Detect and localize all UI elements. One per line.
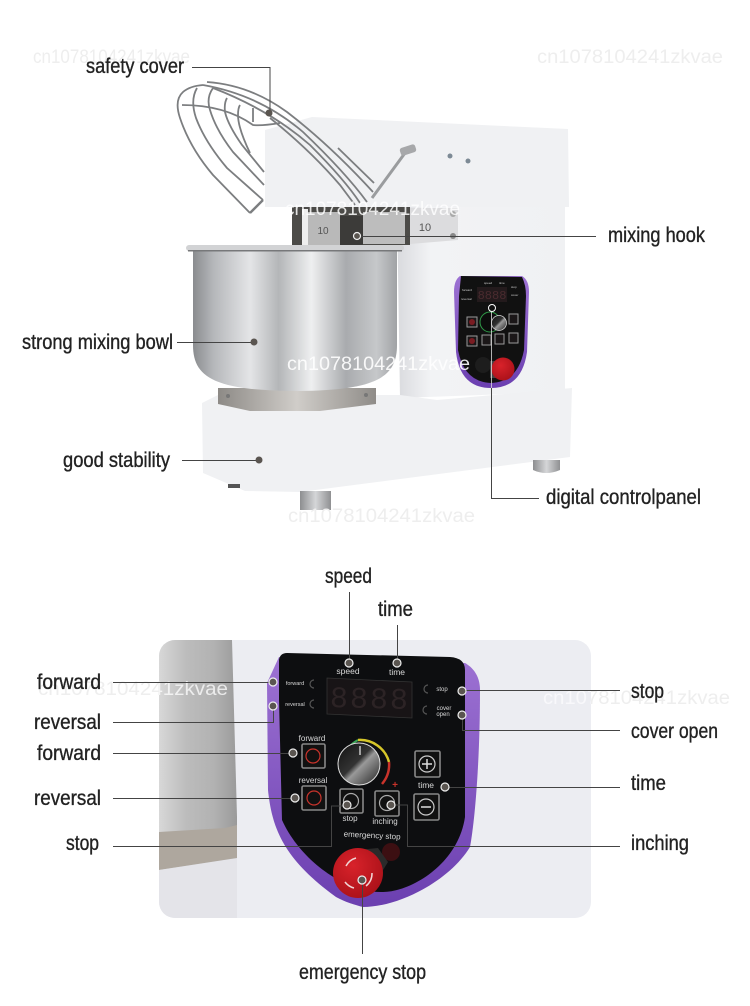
callout: emergency stop [299, 876, 426, 984]
callout: time right [441, 772, 666, 795]
panel labels: inching [372, 817, 398, 826]
callout: reversal button: reversal [34, 787, 101, 810]
mounting hardware: 10 [419, 222, 431, 234]
callout: inching: inching [631, 832, 689, 855]
emergency button [333, 843, 400, 898]
machine head [265, 117, 569, 207]
labels [461, 281, 518, 301]
indicator leds [310, 680, 428, 714]
callout: digital controlpanel [488, 304, 701, 509]
panel labels: reversal [299, 776, 327, 785]
callout: safety cover: safety cover [86, 55, 184, 78]
callout: mixing hook [354, 224, 705, 247]
callout: safety cover [86, 55, 272, 116]
display [327, 678, 412, 718]
callout: stop indicator [458, 680, 664, 703]
display [477, 287, 507, 302]
panel labels: forward [286, 681, 304, 687]
panel labels: reversal [285, 702, 305, 708]
callout: good stability [63, 449, 262, 472]
callout: cover open [458, 711, 718, 743]
panel labels: stop [436, 687, 448, 693]
labels: time [499, 281, 505, 285]
feet [228, 460, 560, 510]
speed knob: + [392, 780, 398, 791]
panel: control panel closeup: 8888 [330, 683, 408, 719]
callout: time top: time [378, 598, 413, 621]
emergency button [475, 357, 491, 373]
callout: stop button: stop [66, 832, 99, 855]
bowl closeup [159, 640, 237, 870]
callout: strong mixing bowl: strong mixing bowl [22, 331, 173, 354]
small control panel [454, 276, 529, 388]
watermark: cn1078104241zkvae [537, 47, 723, 68]
callout: stop indicator: stop [631, 680, 664, 703]
callout: forward indicator: forward [37, 671, 101, 694]
watermark: cn1078104241zkvae [38, 679, 228, 700]
labels: reversal [461, 297, 472, 301]
callout: cover open: cover open [631, 720, 718, 743]
callout: forward button [37, 742, 297, 765]
callout: mixing hook: mixing hook [608, 224, 705, 247]
labels: stop [511, 285, 517, 289]
panel labels: speed [336, 666, 360, 676]
callout: forward button: forward [37, 742, 101, 765]
table surface [159, 858, 237, 918]
mounting hardware [292, 207, 458, 245]
black face [279, 653, 465, 892]
panel labels: time [389, 667, 405, 677]
callout: reversal button [34, 787, 299, 810]
knob [480, 312, 500, 332]
base [202, 388, 572, 492]
bowl base ring [218, 388, 376, 411]
panel face [458, 276, 526, 383]
watermark: cn1078104241zkvae [543, 688, 730, 709]
watermark: cn1078104241zkvae [33, 47, 190, 68]
callout: emergency stop: emergency stop [299, 961, 426, 984]
bowl foot [159, 825, 237, 870]
panel border [454, 276, 529, 388]
backdrop [232, 640, 591, 918]
watermark: cn1078104241zkvae [285, 199, 460, 220]
panel labels: time [418, 780, 434, 790]
pivot bolt [399, 144, 417, 156]
panel labels: stop [342, 814, 358, 823]
callout: digital controlpanel: digital controlpanel [546, 486, 701, 509]
labels: cover [511, 293, 518, 297]
callout: reversal indicator [34, 702, 277, 734]
buttons [302, 744, 440, 820]
head screws [448, 154, 452, 158]
bowl [193, 250, 397, 391]
panel labels: emergency stop [343, 830, 401, 842]
speed knob [338, 740, 398, 791]
panel labels: open [436, 712, 450, 718]
callout: good stability: good stability [63, 449, 170, 472]
callout: time right: time [631, 772, 666, 795]
labels: speed [484, 281, 493, 285]
labels: forward [462, 288, 472, 292]
watermark: cn1078104241zkvae [288, 506, 475, 527]
panel labels [285, 666, 451, 842]
watermark: cn1078104241zkvae [287, 354, 470, 375]
callout: forward indicator [37, 671, 277, 694]
panel: control panel closeup [159, 640, 591, 918]
purple bezel [267, 657, 480, 907]
panel labels: forward [299, 734, 325, 743]
panel labels: cover [437, 706, 451, 712]
machine column [397, 207, 565, 398]
watermark: cn1078104241zkvae [38, 679, 228, 700]
callout: speed [325, 565, 372, 667]
buttons [467, 317, 477, 327]
mounting hardware: 10 [317, 226, 329, 237]
bowl rim [186, 245, 404, 251]
small control panel: 8888 [478, 289, 506, 303]
cover ribs [178, 85, 280, 213]
panel: mixer photo [178, 82, 572, 510]
callout: reversal indicator: reversal [34, 711, 101, 734]
watermark: cn1078104241zkvae [543, 688, 730, 709]
callout: inching [387, 801, 689, 855]
callout: stop button [66, 801, 351, 855]
long cover wires [203, 82, 405, 205]
callout: speed: speed [325, 565, 372, 588]
callout: time top [378, 598, 413, 667]
